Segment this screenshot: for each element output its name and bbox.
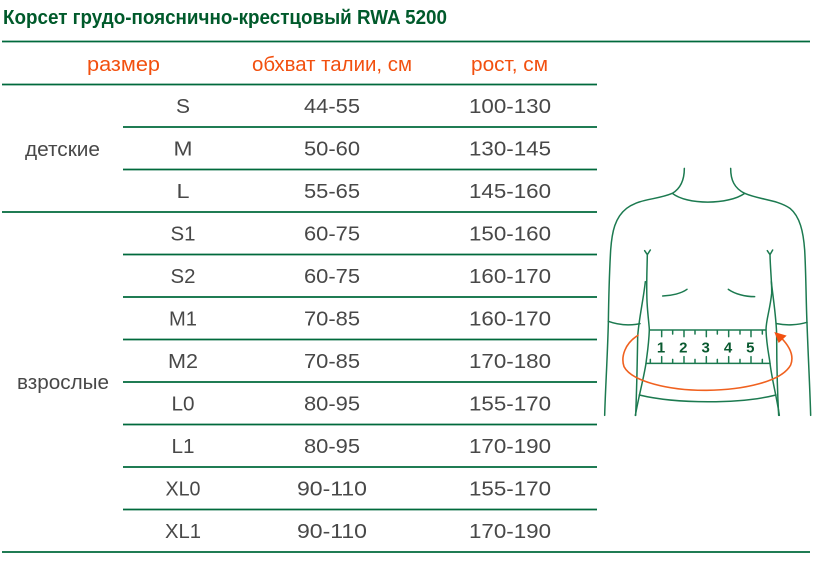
group label: adults: взрослые xyxy=(17,372,109,394)
row L0: L0 xyxy=(172,394,194,416)
row M2 xyxy=(168,351,551,373)
row S: S xyxy=(176,96,190,118)
row S2: 160-170 xyxy=(469,266,551,288)
row M: M xyxy=(174,138,192,160)
row M1: 160-170 xyxy=(469,308,551,330)
measuring tape: 2 xyxy=(679,340,688,357)
row S2: 60-75 xyxy=(304,266,360,288)
row S1: 60-75 xyxy=(304,224,360,246)
row L1: 80-95 xyxy=(304,436,360,458)
row L0: 80-95 xyxy=(304,394,360,416)
size table rows xyxy=(165,96,551,543)
row M1: M1 xyxy=(169,308,197,330)
row S2 xyxy=(170,266,551,288)
row M2: 170-180 xyxy=(469,351,551,373)
row XL0 xyxy=(166,478,551,500)
row M xyxy=(174,138,551,160)
row XL1: 90-110 xyxy=(297,521,367,543)
row XL1 xyxy=(165,521,551,543)
row XL1: XL1 xyxy=(165,521,201,543)
row L: L xyxy=(176,181,190,203)
row M1: 70-85 xyxy=(304,308,360,330)
measuring tape: 4 xyxy=(724,340,733,357)
illustration: torso with waist measurement xyxy=(605,168,811,415)
table header: размер xyxy=(87,54,160,76)
row L1: L1 xyxy=(172,436,194,458)
row L0: 155-170 xyxy=(469,394,551,416)
measuring tape: 3 xyxy=(701,340,710,357)
row L1: 170-190 xyxy=(469,436,551,458)
row S: 100-130 xyxy=(469,96,551,118)
row XL0: 90-110 xyxy=(297,478,367,500)
group label: children: детские xyxy=(25,139,100,161)
row XL1: 170-190 xyxy=(469,521,551,543)
table header xyxy=(87,54,548,76)
row S1: S1 xyxy=(170,224,196,246)
row L: 55-65 xyxy=(304,181,360,203)
table header: рост, см xyxy=(471,54,548,76)
row M: 130-145 xyxy=(469,138,551,160)
measuring tape: 1 xyxy=(657,340,665,357)
row M1 xyxy=(169,308,551,330)
measuring tape xyxy=(646,330,770,363)
row S xyxy=(176,96,551,118)
orange arrow around waist xyxy=(623,332,792,390)
measuring tape: 5 xyxy=(746,340,755,357)
row M2: 70-85 xyxy=(304,351,360,373)
row S: 44-55 xyxy=(304,96,360,118)
table header: обхват талии, см xyxy=(252,54,412,76)
row M2: M2 xyxy=(168,351,198,373)
row XL0: 155-170 xyxy=(469,478,551,500)
row XL0: XL0 xyxy=(166,478,200,500)
row S2: S2 xyxy=(170,266,196,288)
row L0 xyxy=(172,394,551,416)
row S1 xyxy=(170,224,551,246)
row L: 145-160 xyxy=(469,181,551,203)
row L xyxy=(176,181,551,203)
row L1 xyxy=(172,436,551,458)
torso outline xyxy=(605,168,811,415)
row M: 50-60 xyxy=(304,138,360,160)
row S1: 150-160 xyxy=(469,224,551,246)
title: Корсет грудо-пояснично-крестцовый RWA 5200 xyxy=(3,6,447,29)
